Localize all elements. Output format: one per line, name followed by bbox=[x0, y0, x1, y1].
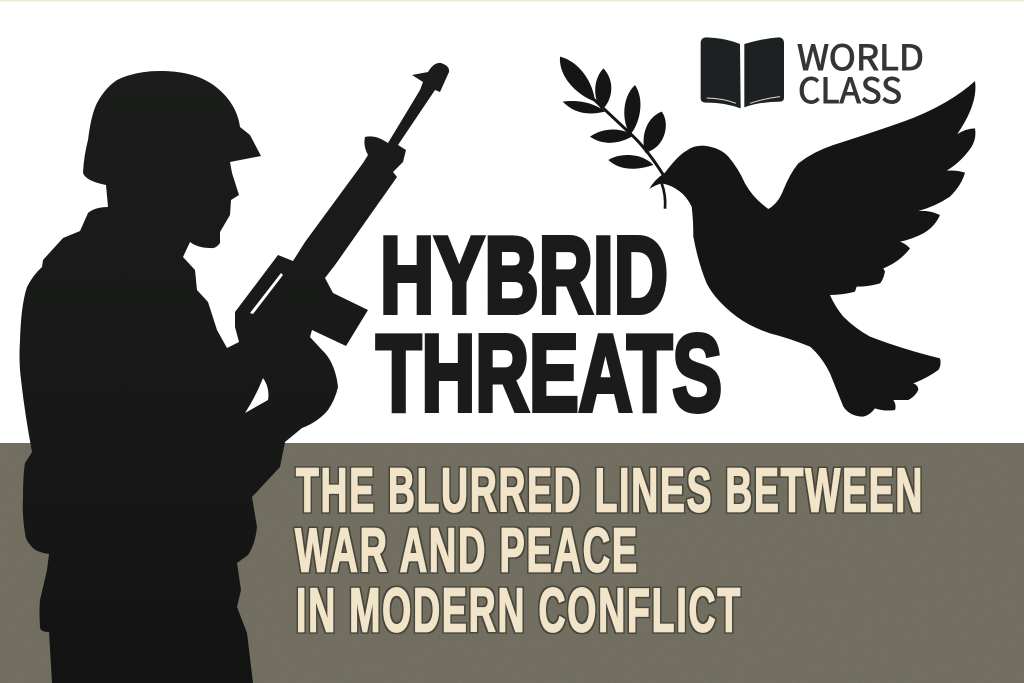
subtitle: IN MODERN CONFLICT bbox=[296, 576, 742, 646]
subtitle bbox=[295, 456, 924, 646]
title: Hybrid Threats: HYBRID bbox=[380, 214, 668, 336]
icon: open book bbox=[701, 37, 784, 108]
panel: olive subtitle band bbox=[0, 443, 1024, 683]
title: Hybrid Threats bbox=[376, 214, 722, 434]
logo text: CLASS bbox=[798, 63, 902, 114]
logo text: WORLD bbox=[797, 30, 924, 81]
olive branch bbox=[560, 57, 666, 209]
logo text bbox=[797, 30, 924, 114]
icon: soldier silhouette with rifle bbox=[20, 63, 449, 683]
title: Hybrid Threats: THREATS bbox=[376, 312, 722, 434]
icon: dove with olive branch bbox=[560, 57, 975, 417]
subtitle: WAR AND PEACE bbox=[295, 516, 639, 586]
logo: World Class bbox=[701, 30, 924, 114]
